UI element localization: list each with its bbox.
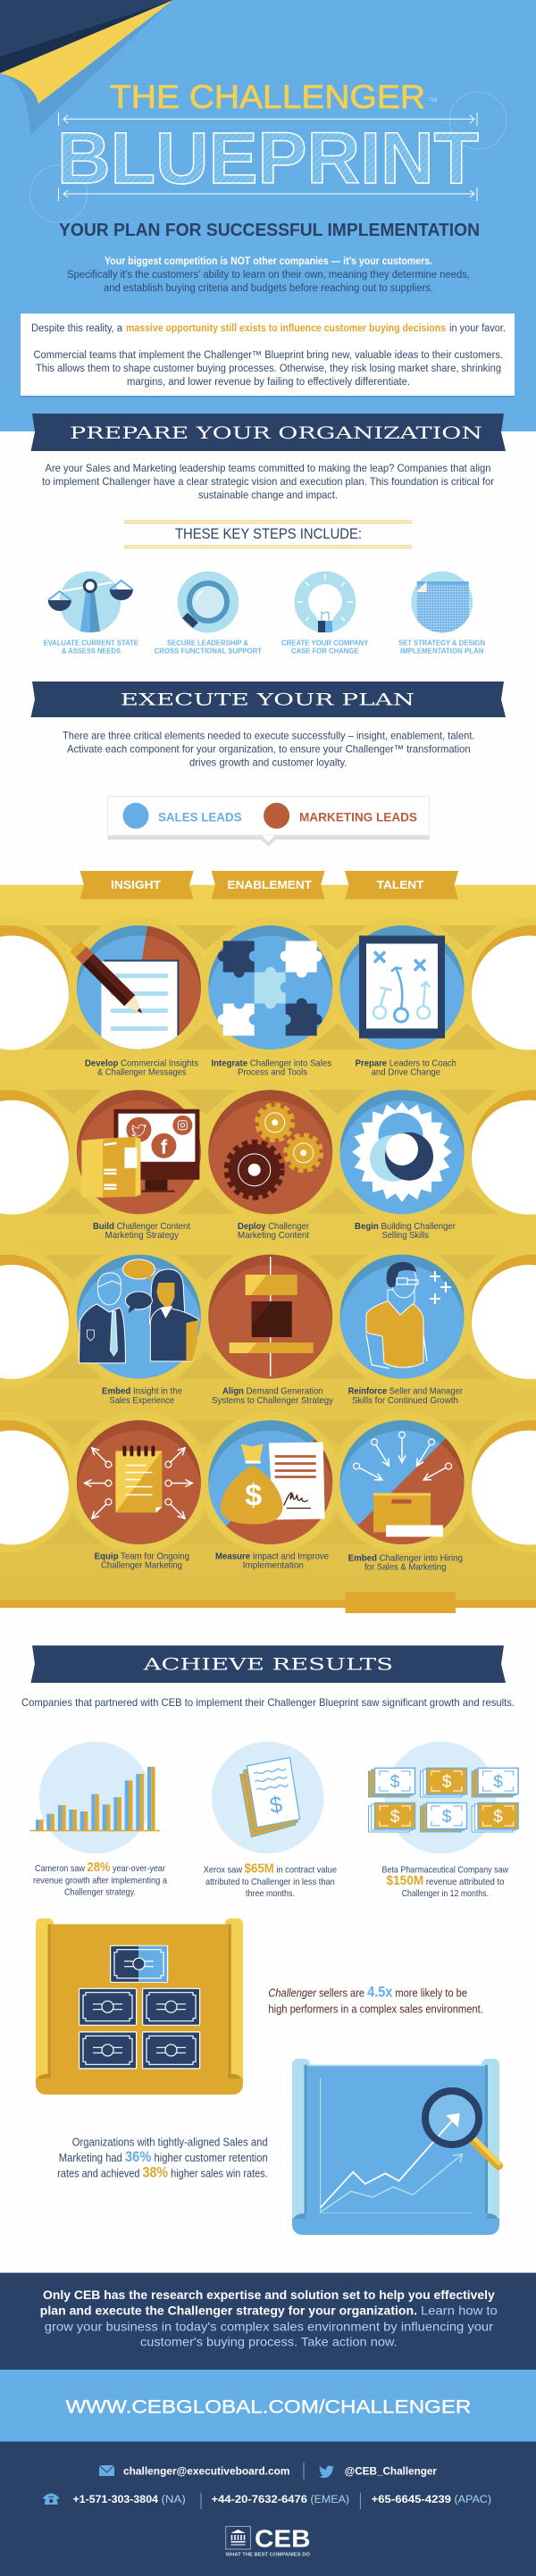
banner: achieve results: ACHIEVE RESULTS (142, 1655, 393, 1675)
text: results intro: Companies that partnered with CEB to implement their Challenger Blueprint saw significant growth and results. (21, 1696, 515, 1709)
circle icon: equip team notepad (76, 1420, 201, 1556)
heading: key steps (124, 521, 412, 548)
text: execute paragraph: drives growth and customer loyalty. (189, 757, 347, 769)
stat: beta pharmaceutical: Challenger in 12 months. (402, 1888, 489, 1899)
captions: row 2: Deploy Challenger (238, 1221, 309, 1232)
text: prepare paragraph (42, 462, 494, 501)
stat: aligned organizations: rates and achieved 38% higher sales win rates. (57, 2163, 268, 2180)
panel: opportunity white box: This allows them to shape customer buying processes. Otherwise, they risk losing market share, shrinking (36, 364, 501, 374)
banner: achieve results (30, 1645, 506, 1683)
intro text: Your biggest competition is NOT other companies — it's your customers. (105, 256, 432, 267)
url band (0, 2370, 536, 2442)
panel: opportunity white box: massive opportunity still exists to influence customer buying decisions (126, 323, 446, 334)
heading: key steps: THESE KEY STEPS INCLUDE: (175, 525, 362, 542)
text: prepare paragraph: Are your Sales and Marketing leadership teams committed to making the leap? Companies that align (45, 462, 491, 474)
captions: row 3: Sales Experience (109, 1395, 174, 1406)
captions: row 2: Marketing Content (238, 1230, 309, 1241)
tab: talent (345, 871, 458, 899)
text: prepare paragraph: sustainable change and impact. (198, 489, 338, 501)
panel: opportunity white box: Commercial teams that implement the Challenger™ Blueprint bring new, valuable ideas to their customers. (34, 350, 503, 361)
intro text (67, 256, 470, 294)
captions: row 3: Skills for Continued Growth (352, 1395, 458, 1406)
panel: yellow execution section (0, 885, 536, 1613)
title block: YOUR PLAN FOR SUCCESSFUL IMPLEMENTATION (59, 221, 480, 240)
icon: twitter bird (319, 2465, 334, 2478)
stat: cameron: revenue growth after implementing a (33, 1875, 167, 1886)
labels: key steps: & ASSESS NEEDS (62, 647, 121, 656)
banner: prepare your organization (30, 414, 506, 451)
circle icon: reinforce skills man (339, 1254, 465, 1390)
legend (107, 797, 430, 847)
text: execute paragraph: There are three critical elements needed to execute successfully – insight, enablement, talent. (63, 730, 475, 742)
tab: insight: INSIGHT (111, 878, 161, 891)
logo: CEB (226, 2525, 311, 2558)
url band: WWW.CEBGLOBAL.COM/CHALLENGER (66, 2397, 471, 2418)
captions: row 3: Reinforce Seller and Manager (348, 1386, 463, 1397)
text: phone numbers: +1-571-303-3804 (73, 2495, 159, 2505)
captions: row 1: & Challenger Messages (97, 1067, 187, 1078)
circle icon: begin selling skills burst (339, 1090, 465, 1225)
captions: row 3: Embed Insight in the (102, 1386, 182, 1397)
panel: opportunity white box: Despite this reality, a (31, 323, 123, 334)
captions: row 1: Develop Commercial Insights (85, 1058, 198, 1068)
stat: beta pharmaceutical: $150M revenue attributed to (386, 1873, 505, 1888)
text: phone numbers: (APAC) (454, 2495, 491, 2505)
labels: key steps: CROSS FUNCTIONAL SUPPORT (155, 647, 263, 656)
logo: CEB: CEB (255, 2525, 311, 2553)
tab: insight (80, 871, 194, 899)
stat: xerox: Xerox saw $65M in contract value (204, 1861, 337, 1877)
circle icon: deploy gears (208, 1090, 333, 1225)
labels: key steps (44, 639, 485, 656)
circle icon: integrate puzzle (208, 925, 333, 1061)
text: phone numbers: (NA) (161, 2495, 186, 2505)
captions: row 3: Align Demand Generation (222, 1386, 323, 1397)
text: phone numbers: +65-6645-4239 (372, 2495, 451, 2505)
page curl corner (0, 0, 173, 135)
panel: call to action: plan and execute the Challenger strategy for your organization. (40, 2304, 417, 2318)
labels: key steps: SET STRATEGY & DESIGN (398, 639, 485, 648)
title block: BLUEPRINT (57, 118, 479, 199)
icon: money stacks: $ (493, 1773, 503, 1792)
panel: call to action: customer's buying process. Take action now. (140, 2335, 398, 2349)
circle icon: build content monitor: f (161, 1136, 168, 1158)
text: prepare paragraph: to implement Challenger have a clear strategic vision and execution plan. This foundation is critical for (42, 475, 494, 488)
labels: key steps: SECURE LEADERSHIP & (167, 639, 248, 648)
panel: opportunity white box: margins, and lower revenue by failing to effectively differentiate. (127, 377, 410, 388)
stat: beta pharmaceutical: Beta Pharmaceutical Company saw (382, 1865, 508, 1876)
captions: row 4: Implementation (243, 1560, 304, 1571)
stat: beta pharmaceutical (382, 1865, 508, 1899)
stat: challenger sellers (268, 1984, 483, 2015)
captions: row 2: Begin Building Challenger (355, 1221, 456, 1232)
captions: row 1: Integrate Challenger into Sales (211, 1058, 331, 1068)
stat: xerox (204, 1861, 337, 1899)
stat: aligned organizations (57, 2135, 268, 2180)
captions: row 4 (95, 1551, 463, 1572)
panel: call to action: Learn how to (421, 2304, 498, 2318)
circle icon: prepare leaders playbook (339, 925, 465, 1061)
bar chart: revenue growth (30, 1742, 160, 1853)
icon: money stacks: $ (390, 1808, 400, 1827)
panel: call to action (0, 2272, 536, 2370)
title block (30, 79, 507, 240)
icon: money stacks: $ (442, 1773, 452, 1792)
captions: row 4: Equip Team for Ongoing (95, 1551, 189, 1562)
circle icon: develop insights (70, 925, 201, 1050)
footer (0, 2442, 536, 2576)
text: phone numbers: (EMEA) (311, 2495, 349, 2505)
captions: row 1: Process and Tools (238, 1067, 307, 1078)
text: email: challenger@executiveboard.com (123, 2467, 289, 2478)
icon: money stacks: $ (390, 1773, 400, 1792)
panel: gold blueprint scroll (36, 1919, 243, 2095)
icon: grid plan (411, 572, 473, 635)
banner: execute your plan: EXECUTE YOUR PLAN (121, 690, 415, 709)
icon: contract documents (212, 1742, 323, 1853)
stat: cameron: Challenger strategy. (64, 1887, 136, 1898)
captions: row 3 (102, 1386, 463, 1406)
stat: challenger sellers: high performers in a complex sales environment. (268, 2002, 483, 2015)
panel: opportunity white box (21, 314, 515, 397)
text: phone numbers: +44-20-7632-6476 (211, 2495, 307, 2505)
stat: xerox: three months. (246, 1888, 295, 1899)
text: execute paragraph: Activate each component for your organization, to ensure your Challenger™ transformation (67, 743, 471, 756)
circle icon: build content monitor (76, 1090, 201, 1225)
labels: key steps: CASE FOR CHANGE (291, 647, 359, 656)
intro text: and establish buying criteria and budgets before reaching out to suppliers. (104, 283, 433, 294)
icon: money stacks (368, 1742, 518, 1853)
icon: scales (48, 572, 133, 632)
text: twitter handle: @CEB_Challenger (345, 2467, 438, 2478)
panel: call to action: grow your business in today's complex sales environment by influencing your (45, 2319, 493, 2333)
captions: row 1: Prepare Leaders to Coach (356, 1058, 456, 1068)
labels: key steps: IMPLEMENTATION PLAN (400, 647, 484, 656)
icon: money stacks: $ (493, 1808, 503, 1827)
captions: row 4: for Sales & Marketing (364, 1561, 447, 1572)
icon: envelope (99, 2465, 114, 2476)
captions: row 4: Measure Impact and Improve (215, 1551, 329, 1562)
stat: aligned organizations: Organizations with tightly-aligned Sales and (72, 2135, 268, 2148)
stat: cameron (33, 1860, 167, 1898)
banner: execute your plan (30, 682, 506, 717)
stat: challenger sellers: Challenger sellers are 4.5x more likely to be (268, 1984, 467, 2001)
tab: enablement: ENABLEMENT (227, 878, 312, 891)
icon: magnifier (178, 572, 239, 632)
captions: row 1 (85, 1058, 456, 1078)
circle icon: embed hiring box (339, 1420, 465, 1544)
legend: MARKETING LEADS (299, 809, 417, 824)
stat: xerox: attributed to Challenger in less than (205, 1877, 335, 1887)
title block: THE CHALLENGER (110, 79, 425, 115)
intro text: Specifically it's the customers' ability to learn on their own, meaning they determine needs, (67, 270, 470, 280)
logo: CEB: WHAT THE BEST COMPANIES DO (226, 2553, 311, 2558)
tab: enablement (211, 871, 325, 899)
icon: light bulb (295, 572, 356, 632)
panel: call to action: Only CEB has the research expertise and solution set to help you effectively (43, 2287, 495, 2302)
circle icon: measure money bag: $ (245, 1479, 262, 1513)
text: phone numbers (73, 2495, 491, 2505)
icon: contract documents: $ (268, 1792, 284, 1819)
captions: row 2: Marketing Strategy (105, 1230, 180, 1241)
panel: opportunity white box: in your favor. (449, 323, 506, 334)
text: execute paragraph (63, 730, 475, 769)
stat: cameron: Cameron saw 28% year-over-year (35, 1860, 165, 1875)
icon: telephone (44, 2494, 59, 2505)
legend: SALES LEADS (158, 809, 241, 824)
circle icon: align demand generation (208, 1254, 333, 1390)
captions: row 1: and Drive Change (372, 1067, 440, 1078)
captions: row 4: Challenger Marketing (101, 1560, 182, 1571)
panel: blue blueprint scroll chart (292, 2059, 499, 2235)
captions: row 4: Embed Challenger into Hiring (348, 1552, 463, 1563)
captions: row 3: Systems to Challenger Strategy (212, 1395, 334, 1406)
captions: row 2 (93, 1221, 456, 1241)
captions: row 2: Selling Skills (382, 1230, 429, 1241)
labels: key steps: CREATE YOUR COMPANY (281, 639, 369, 648)
captions: row 2: Build Challenger Content (93, 1221, 190, 1232)
banner: prepare your organization: PREPARE YOUR ORGANIZATION (70, 423, 482, 443)
circle icon: embed insight people (76, 1254, 201, 1390)
title block: TM (429, 97, 437, 104)
icon: money stacks: $ (442, 1808, 452, 1827)
stat: aligned organizations: Marketing had 36% higher customer retention (59, 2148, 268, 2165)
circle icon: measure money bag (208, 1420, 332, 1544)
tab: talent: TALENT (377, 878, 424, 891)
labels: key steps: EVALUATE CURRENT STATE (44, 639, 138, 648)
